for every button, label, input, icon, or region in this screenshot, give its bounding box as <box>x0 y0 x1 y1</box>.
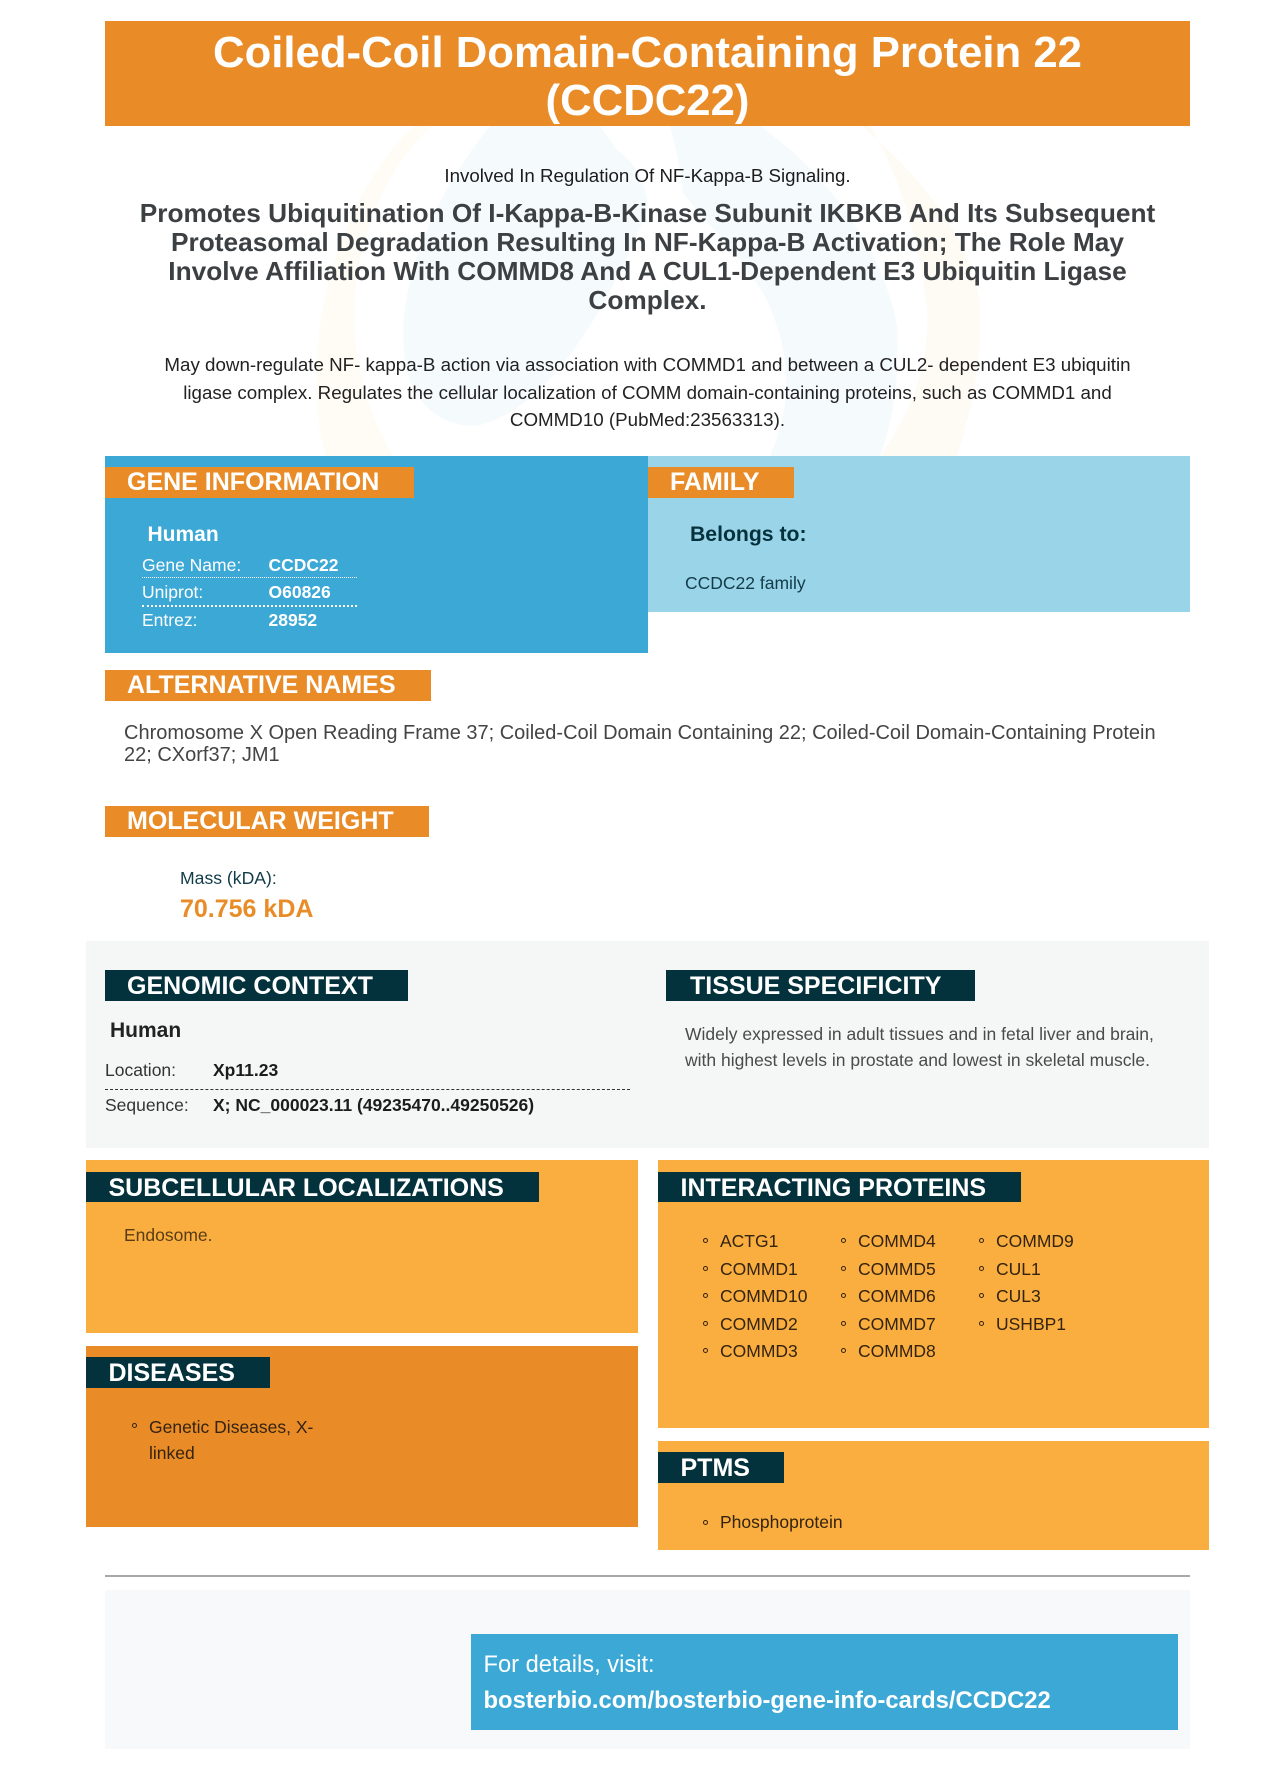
protein list: USHBP1 <box>996 1314 1066 1334</box>
protein list: COMMD8 <box>858 1340 936 1360</box>
protein list <box>703 1230 1074 1360</box>
title banner <box>105 21 1190 126</box>
heading: interacting proteins: INTERACTING PROTEINS <box>680 1174 986 1202</box>
gene table: Gene Name: <box>142 555 241 575</box>
gene table: O60826 <box>268 582 331 602</box>
heading: gene information: GENE INFORMATION <box>127 468 379 496</box>
function bold statement <box>140 198 1155 314</box>
heading: genomic context: GENOMIC CONTEXT <box>127 972 373 1000</box>
gene table: Uniprot: <box>142 582 203 602</box>
genomic table: X; NC_000023.11 (49235470..49250526) <box>213 1095 534 1115</box>
gene table: Entrez: <box>142 610 197 630</box>
panel: genomic context and tissue specificity <box>86 941 1209 1148</box>
protein list: COMMD5 <box>858 1258 936 1278</box>
heading: subcellular localizations: SUBCELLULAR LOCALIZATIONS <box>108 1174 504 1202</box>
disease list: Genetic Diseases, X- <box>149 1417 313 1437</box>
heading: family: FAMILY <box>670 468 759 496</box>
tissue specificity text: Widely expressed in adult tissues and in fetal liver and brain, <box>685 1024 1154 1044</box>
species label: Human <box>110 1019 181 1042</box>
family value: CCDC22 family <box>685 573 806 593</box>
localization text: Endosome. <box>124 1225 213 1245</box>
callout: details link: For details, visit: <box>484 1652 655 1678</box>
protein list: COMMD6 <box>858 1286 936 1306</box>
panel: diseases <box>86 1346 638 1527</box>
tissue specificity text <box>685 1024 1154 1070</box>
protein list: COMMD7 <box>858 1314 936 1334</box>
protein list: COMMD2 <box>720 1314 798 1334</box>
PTM list: Phosphoprotein <box>720 1512 843 1532</box>
gene table <box>142 555 357 630</box>
heading: PTMs: PTMS <box>680 1454 750 1482</box>
function bold statement: Involve Affiliation With COMMD8 And A CUL1-Dependent E3 Ubiquitin Ligase <box>168 256 1127 286</box>
mass label: Mass (kDA): <box>180 868 277 888</box>
function bold statement: Complex. <box>588 284 707 314</box>
function description: ligase complex. Regulates the cellular localization of COMM domain-containing proteins, such as COMMD1 and <box>183 382 1112 403</box>
genomic table <box>105 1060 630 1115</box>
heading: diseases <box>86 1357 270 1388</box>
protein list: ACTG1 <box>720 1230 778 1250</box>
protein list: CUL3 <box>996 1286 1041 1306</box>
disease list <box>132 1417 313 1463</box>
function summary line: Involved In Regulation Of NF-Kappa-B Signaling. <box>444 165 851 186</box>
title banner: Coiled-Coil Domain-Containing Protein 22 <box>213 28 1082 76</box>
function description: COMMD10 (PubMed:23563313). <box>510 409 785 430</box>
heading: PTMs <box>658 1452 784 1483</box>
panel: gene information <box>105 456 648 653</box>
function description: May down-regulate NF- kappa-B action via association with COMMD1 and between a CUL2- dependent E3 ubiquitin <box>164 354 1131 375</box>
genomic table: Xp11.23 <box>213 1060 278 1080</box>
heading: molecular weight: MOLECULAR WEIGHT <box>127 807 394 835</box>
function bold statement: Promotes Ubiquitination Of I-Kappa-B-Kinase Subunit IKBKB And Its Subsequent <box>140 198 1155 228</box>
footer panel <box>105 1590 1190 1749</box>
heading: alternative names: ALTERNATIVE NAMES <box>127 671 396 699</box>
heading: tissue specificity: TISSUE SPECIFICITY <box>690 972 941 1000</box>
panel: interacting proteins <box>658 1160 1209 1428</box>
protein list: COMMD9 <box>996 1230 1074 1250</box>
title banner: (CCDC22) <box>546 76 749 124</box>
protein list: COMMD3 <box>720 1340 798 1360</box>
genomic table: Sequence: <box>105 1095 189 1115</box>
mass value: 70.756 kDA <box>180 895 313 923</box>
function bold statement: Proteasomal Degradation Resulting In NF-Kappa-B Activation; The Role May <box>171 226 1124 256</box>
alternative names text: Chromosome X Open Reading Frame 37; Coiled-Coil Domain Containing 22; Coiled-Coil Domain-Containing Protein <box>124 722 1156 744</box>
genomic table: Location: <box>105 1060 176 1080</box>
background watermark logo <box>316 126 980 456</box>
disease list: linked <box>149 1443 195 1463</box>
protein list: COMMD10 <box>720 1286 808 1306</box>
alternative names text <box>124 722 1156 766</box>
gene table: CCDC22 <box>268 555 339 575</box>
panel: family <box>648 456 1190 612</box>
protein list: CUL1 <box>996 1258 1041 1278</box>
protein list: COMMD1 <box>720 1258 798 1278</box>
family label: Belongs to: <box>690 523 807 546</box>
protein list: COMMD4 <box>858 1230 936 1250</box>
callout: details link: bosterbio.com/bosterbio-gene-info-cards/CCDC22 <box>484 1687 1051 1714</box>
tissue specificity text: with highest levels in prostate and lowest in skeletal muscle. <box>685 1050 1150 1070</box>
gene table: 28952 <box>268 610 317 630</box>
heading: diseases: DISEASES <box>108 1359 235 1387</box>
panel: PTMs <box>658 1441 1209 1550</box>
function description <box>164 354 1131 430</box>
callout: details link <box>471 1634 1178 1730</box>
species label: Human <box>148 523 219 546</box>
alternative names text: 22; CXorf37; JM1 <box>124 744 280 766</box>
panel: subcellular localizations <box>86 1160 638 1333</box>
heading: family <box>648 467 794 498</box>
